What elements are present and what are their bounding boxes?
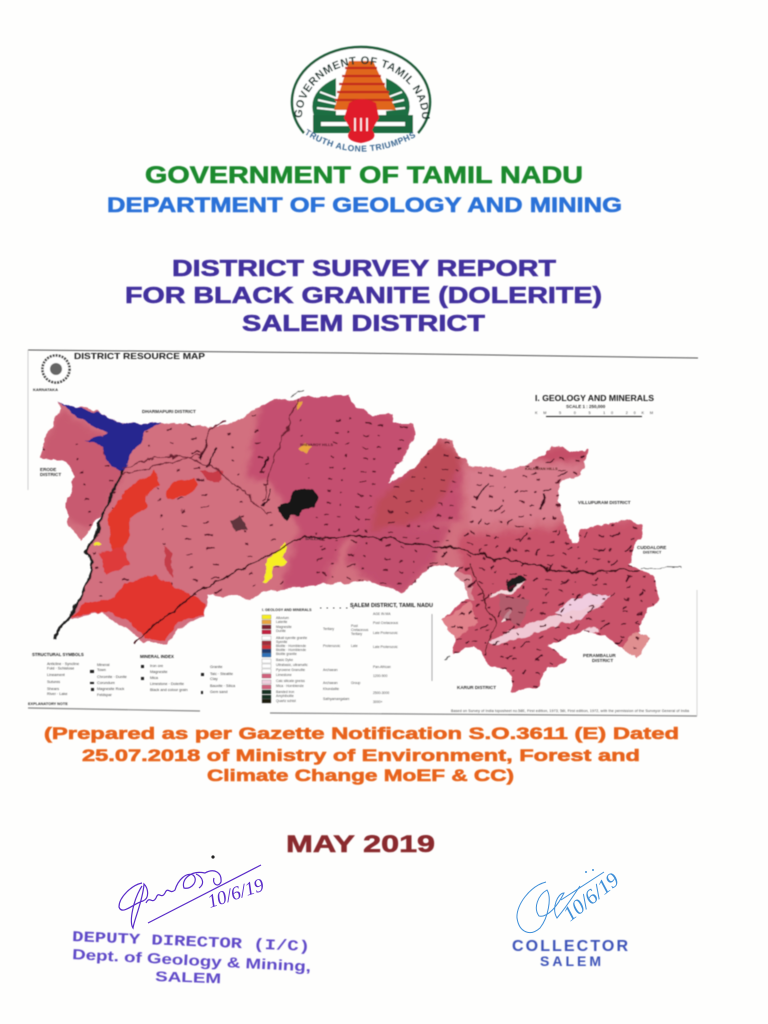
legend: Salem district geology table: Post: [351, 624, 358, 628]
legend: Salem district geology table: Laterite: [276, 620, 287, 624]
legend: structural symbols and mineral index: [28, 652, 236, 706]
legend: Salem district geology table: Late: [351, 644, 358, 648]
legend: Salem district geology table: Sathyamangalam: [323, 697, 350, 701]
report title: SALEM DISTRICT: [242, 310, 485, 336]
geology and minerals scale: SCALE 1 : 250,000: [566, 404, 606, 409]
legend: structural symbols and mineral index: Shears: [47, 687, 59, 691]
stamp: collector: COLLECTOR: [512, 938, 628, 955]
legend: Salem district geology table: Biotite granite: [276, 652, 297, 656]
legend: Salem district geology table: Pyroxene Granulite: [276, 668, 305, 672]
west scattered mineral marks: [42, 408, 328, 597]
geological map shape: [39, 390, 682, 694]
geology and minerals scale: KM 5 0 5 10 20KM: [535, 411, 653, 415]
grey patches: [500, 595, 530, 625]
geology and minerals scale: I. GEOLOGY AND MINERALS: [535, 394, 655, 403]
legend: Salem district geology table: Limestone: [276, 673, 292, 677]
legend: Salem district geology table: Tertiary: [323, 627, 334, 631]
black dolerite mass: [278, 487, 320, 521]
map place labels: ERODE: [40, 467, 56, 472]
legend: structural symbols and mineral index: Bauxite · Silica: [210, 684, 236, 688]
report title: DISTRICT SURVEY REPORT: [172, 255, 556, 281]
blue reservoir: [57, 402, 160, 472]
stamp: deputy director: DEPUTY DIRECTOR (I/C): [72, 929, 310, 956]
legend: structural symbols and mineral index: River · Lake: [47, 692, 67, 696]
map icon: resource map seal: [42, 356, 70, 382]
legend: structural symbols and mineral index: Feldspar: [97, 693, 113, 697]
legend: Salem district geology table: Biotite · Hornblende: [276, 648, 306, 652]
legend: structural symbols and mineral index: Anticline · Syncline: [47, 662, 79, 666]
lithology zones: [40, 390, 665, 695]
map place labels: SHEVAROY HILLS: [300, 443, 333, 447]
legend: Salem district geology table: Group: [351, 681, 361, 685]
heading: department: DEPARTMENT OF GEOLOGY AND MINING: [107, 194, 622, 217]
legend: structural symbols and mineral index: STRUCTURAL SYMBOLS: [32, 652, 84, 657]
report title: FOR BLACK GRANITE (DOLERITE): [125, 282, 602, 308]
map place labels: DISTRICT: [40, 472, 61, 477]
legend: Salem district geology table: SALEM DISTRICT, TAMIL NADU: [350, 603, 433, 609]
stamp: deputy director: [72, 929, 311, 986]
legend: structural symbols and mineral index: Iron ore: [150, 664, 163, 668]
stamp: deputy director: Dept. of Geology & Mining,: [72, 947, 311, 976]
legend: structural symbols and mineral index: Magnesite: [150, 670, 168, 674]
legend: Salem district geology table: Late Proterozoic: [373, 631, 398, 635]
pale pink limestone: [556, 593, 610, 620]
legend: Salem district geology table: Dunite: [276, 629, 286, 633]
map place labels: DISTRICT: [643, 550, 662, 554]
signature: deputy director: [119, 855, 267, 928]
map place labels: [33, 387, 666, 690]
legend swatches: [262, 615, 271, 703]
signature: collector: 10/6/19: [558, 867, 624, 926]
legend: Salem district geology table: I. GEOLOGY AND MINERALS: [262, 608, 312, 612]
map place labels: KALRAYAN HILLS: [525, 467, 558, 471]
legend: Salem district geology table: 3000+: [373, 700, 383, 704]
legend: structural symbols and mineral index: Lineament: [47, 673, 66, 677]
legend: Salem district geology table: Cretaceous: [351, 628, 369, 632]
legend: structural symbols and mineral index: Black and colour grain: [150, 688, 188, 692]
legend: Salem district geology table: [262, 603, 433, 704]
legend: structural symbols and mineral index: Mica: [150, 676, 159, 680]
title: Government of Tamil Nadu: GOVERNMENT OF TAMIL NADU: [145, 162, 583, 189]
stamp: collector: SALEM: [540, 953, 601, 969]
legend: Salem district geology table: Alkali syenite granite: [276, 636, 307, 640]
legend: Salem district geology table: Pan-African: [373, 665, 391, 669]
legend: Salem district geology table: Ultrabasic, ultramafic: [276, 663, 308, 667]
legend: structural symbols and mineral index: Magnesite Rock: [97, 687, 124, 691]
map place labels: PERAMBALUR: [583, 653, 616, 658]
legend: structural symbols and mineral index: MINERAL INDEX: [140, 654, 174, 659]
legend: structural symbols and mineral index: Town: [97, 668, 106, 672]
legend: Salem district geology table: Tertiary: [351, 632, 362, 636]
legend: Salem district geology table: Amphibolite: [276, 694, 294, 698]
east scattered mineral marks: [307, 419, 673, 699]
stamp: deputy director: SALEM: [155, 968, 221, 986]
legend: structural symbols and mineral index: Fold · Schistose: [47, 666, 74, 670]
emblem: Government of Tamil Nadu seal: TRUTH ALONE TRIUMPHS: [305, 128, 416, 152]
legend: Salem district geology table: Mica · Hornblende: [276, 684, 304, 688]
legend: structural symbols and mineral index: Granite: [210, 665, 222, 669]
report title: [125, 255, 602, 336]
gazette notification note: Climate Change MoEF & CC): [207, 766, 514, 785]
legend: Salem district geology table: Proterozoic: [323, 644, 340, 648]
legend: Salem district geology table: Syenite: [276, 640, 287, 644]
map place labels: VILLUPURAM DISTRICT: [578, 500, 631, 505]
map place labels: DHARMAPURI DISTRICT: [142, 409, 196, 414]
geology and minerals scale: [535, 394, 655, 416]
legend: Salem district geology table: Calc silicate gneiss: [276, 679, 305, 683]
date: May 2019: MAY 2019: [286, 831, 435, 858]
map footnote: Based on Survey of India toposheet no.58E, First edition, 1973; 58I, First edition, 1972, with the permission of the Surveyor General of India: [451, 709, 689, 713]
legend: Salem district geology table: Late Proterozoic: [373, 645, 398, 649]
red intrusions: [108, 470, 160, 555]
legend: Salem district geology table: Quartz schist: [276, 699, 296, 703]
gazette notification note: 25.07.2018 of Ministry of Environment, Forest and: [82, 746, 640, 765]
map frame: [28, 350, 698, 358]
map heading: DISTRICT RESOURCE MAP: [74, 351, 205, 361]
map place labels: KARUR DISTRICT: [457, 685, 496, 690]
legend: structural symbols and mineral index: Talc · Steatite: [210, 672, 233, 676]
map place labels: CUDDALORE: [637, 545, 666, 550]
emblem: Government of Tamil Nadu seal: [290, 44, 432, 152]
yellow magnesite band: [262, 542, 288, 585]
legend: structural symbols and mineral index: EXPLANATORY NOTE: [28, 702, 68, 706]
legend: structural symbols and mineral index: Mineral: [97, 663, 110, 667]
signature: deputy director: 10/6/19: [205, 875, 267, 913]
legend: Salem district geology table: Archaean: [323, 681, 338, 685]
map place labels: DISTRICT: [592, 658, 613, 663]
legend: Salem district geology table: Post Cretaceous: [373, 621, 398, 625]
legend: structural symbols and mineral index: Limestone · Dolerite: [150, 682, 184, 686]
legend: structural symbols and mineral index: Gem sand: [210, 690, 228, 694]
legend: Salem district geology table: Basic Dyke: [276, 658, 293, 662]
legend: Salem district geology table: 2500-3000: [373, 691, 389, 695]
gazette notification note: [44, 724, 679, 785]
legend: Salem district geology table: Archaean: [323, 668, 338, 672]
stamp: collector: [512, 938, 628, 969]
gazette notification note: (Prepared as per Gazette Notification S.O.3611 (E) Dated: [44, 724, 679, 743]
map place labels: SALEM: [305, 536, 321, 541]
signature: collector: [517, 867, 624, 933]
legend: Salem district geology table: Khondalite: [323, 687, 339, 691]
legend: Salem district geology table: Biotite · Hornblende: [276, 644, 306, 648]
map place labels: KARNATAKA: [33, 387, 58, 392]
map panel: district resource map: [27, 348, 698, 718]
legend: Salem district geology table: Alluvium: [276, 616, 289, 620]
legend: structural symbols and mineral index: Clay: [210, 677, 218, 681]
legend: Salem district geology table: AGE IN MA: [373, 612, 391, 616]
legend: structural symbols and mineral index: Sutures: [47, 680, 60, 684]
legend: structural symbols and mineral index: Corundum: [97, 681, 115, 685]
emblem: Government of Tamil Nadu seal: GOVERNMENT OF TAMIL NADU: [294, 56, 430, 120]
legend: structural symbols and mineral index: Chromite · Dunite: [97, 675, 127, 679]
river and railway lines: [55, 470, 122, 640]
legend: Salem district geology table: 1200-900: [373, 674, 387, 678]
legend: Salem district geology table: Banded iron: [276, 690, 294, 694]
legend: Salem district geology table: Magnesite: [276, 625, 292, 629]
